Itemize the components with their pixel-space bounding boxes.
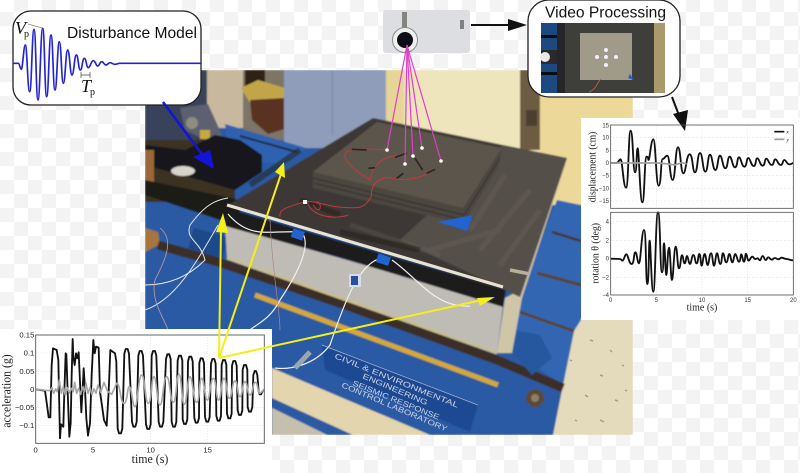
pink lines from camera to markers [387, 45, 441, 164]
chart: displacement [587, 124, 793, 208]
chart: rotation: 2 [606, 238, 610, 244]
plate label: Civil & Environmental Engineering [322, 345, 478, 433]
chart: displacement: x [785, 130, 789, 136]
plate label: Civil & Environmental Engineering: SEISMIC RESPONSE [351, 379, 441, 422]
chart: displacement: displacement (cm) [587, 131, 598, 202]
label: Vp: V [15, 18, 28, 38]
arrow: camera to video processing [471, 19, 527, 31]
chart: acceleration: time (s) [132, 452, 168, 466]
panel: displacement and rotation charts [581, 110, 800, 320]
chart: acceleration: 0 [30, 385, 34, 394]
chart: displacement: y [785, 137, 789, 143]
marker dots [385, 146, 443, 166]
arrow: video processing to charts [672, 97, 680, 118]
title: disturbance model: Disturbance Model [67, 25, 197, 42]
label: Tp [81, 72, 95, 98]
label: Tp: T [81, 76, 93, 96]
photo: shake table in laboratory [145, 70, 633, 435]
chart: rotation: −4 [602, 293, 610, 299]
plate label: Civil & Environmental Engineering: CIVIL & ENVIRONMENTAL [333, 352, 460, 410]
chart: acceleration: 0.1 [24, 349, 34, 358]
label: Tp: p [90, 87, 95, 98]
chart: rotation: rotation θ (deg) [590, 223, 601, 284]
chart: acceleration: 0.15 [19, 331, 34, 340]
yellow arrows from acceleration chart to sensors [216, 162, 495, 358]
plate label: Civil & Environmental Engineering: CONTROL LABORATORY [340, 381, 449, 433]
arrow tip over chart [673, 110, 688, 131]
chart: rotation: −2 [602, 275, 610, 281]
panel: disturbance model [13, 11, 202, 105]
speckled floor [570, 340, 627, 422]
chart: displacement: 15 [602, 124, 610, 130]
chart: displacement: −10 [599, 186, 610, 192]
panel: video processing [528, 0, 680, 97]
chart: rotation: 15 [744, 298, 752, 304]
chart: acceleration: −0.1 [19, 421, 34, 430]
chart: displacement: −15 [599, 199, 610, 205]
chart: acceleration: 15 [203, 445, 212, 454]
chart: acceleration: 10 [146, 445, 155, 454]
chart: rotation: time (s) [687, 303, 717, 314]
label: Vp: p [24, 29, 29, 40]
chart: rotation: 10 [699, 298, 706, 304]
chart: acceleration: 0.05 [19, 367, 34, 376]
chart: rotation: 4 [606, 219, 610, 225]
camera [383, 10, 470, 53]
title: video processing: Video Processing [545, 4, 666, 22]
plate label: Civil & Environmental Engineering: ENGINEERING [361, 372, 429, 407]
chart: displacement: 10 [602, 136, 610, 142]
chart: acceleration: 5 [91, 445, 95, 454]
chart: rotation: 0 [606, 257, 610, 263]
chart: rotation: 20 [790, 298, 797, 304]
label: Vp [15, 18, 42, 40]
chart: acceleration: 0 [34, 445, 38, 454]
pulse waveform [13, 28, 202, 100]
chart: displacement: 5 [606, 148, 610, 154]
chart: acceleration: −0.05 [15, 403, 34, 412]
chart: displacement: 0 [606, 161, 610, 167]
panel: acceleration chart [0, 329, 272, 473]
chart: rotation: 5 [655, 298, 659, 304]
blue arrow: disturbance model to shaker [163, 102, 214, 169]
video frame [540, 23, 665, 93]
chart: displacement: −5 [602, 173, 610, 179]
chart: rotation: 0 [609, 298, 613, 304]
chart: acceleration [0, 331, 264, 466]
chart: rotation [590, 212, 797, 314]
